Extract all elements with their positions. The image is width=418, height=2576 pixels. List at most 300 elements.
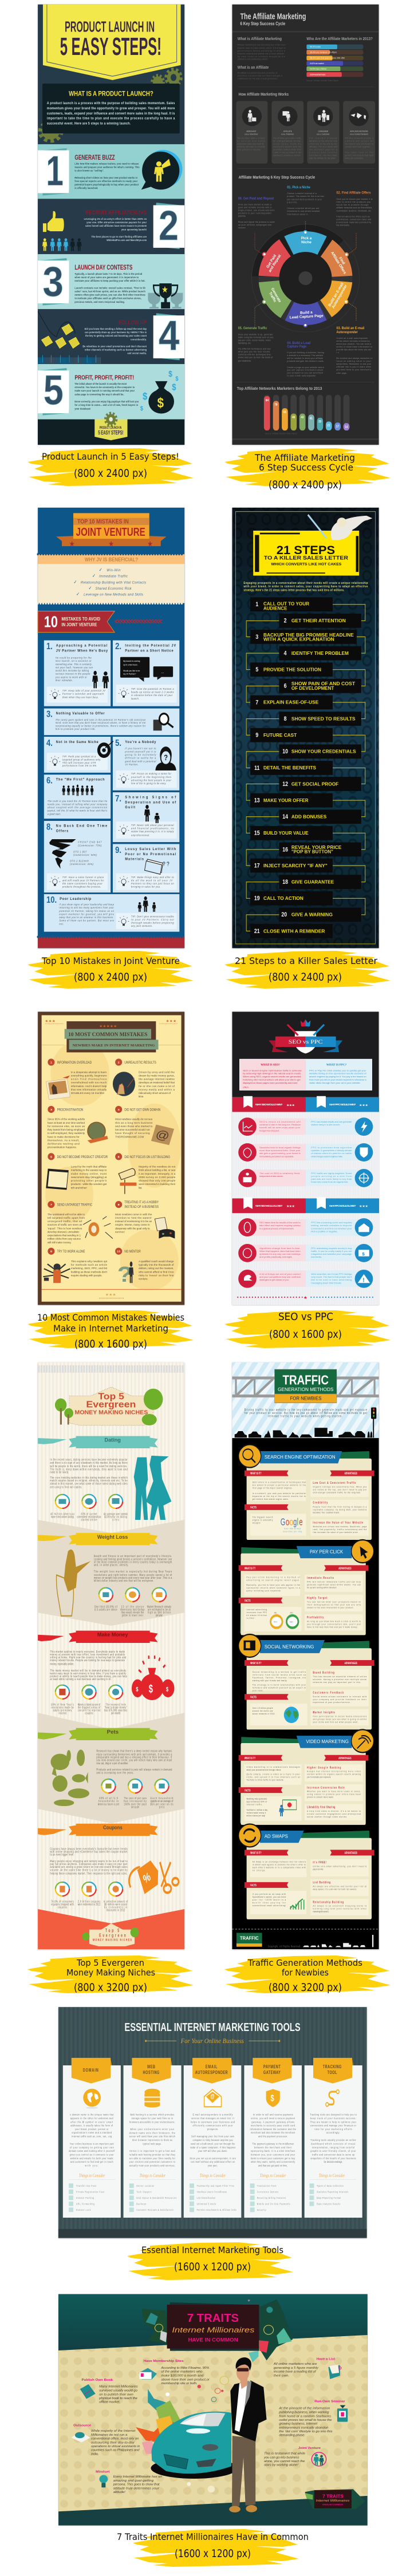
header block: ★★★ [45,1019,56,1024]
wheel section text: about your product. You can build a [337,343,371,345]
section: social networking: Facebook, Twitter, Pinterest, Instagram, etc [253,1677,306,1679]
step 4: can potentially dram up your business by +500%? This is [85,331,147,334]
niche body text: This market applies to nearly everyone. Everybody wants to make [50,1650,125,1653]
niche body text: The make money market will be in demand almost as everybody [50,1669,127,1672]
section: search engine optimization: FACTS [250,1506,257,1509]
title badge [55,1387,163,1425]
mistake body text: were interested in building their [139,1183,176,1186]
mistake body text: Lured by the myth that affiliate [71,1165,107,1168]
wheel section text: Be creative and always remember to [337,357,372,359]
how it works cards: a.k.a. Advertiser [245,133,258,135]
step 5: Done correctly, you can enjoy big paydays that will last you [74,400,139,403]
mistake cards: The truth is you need the JV Partner more than he [48,800,108,803]
bar chart: who are the marketers: 38.6% are between 35~45yrs [310,51,337,54]
comparison rows: site gets a good ranking, your brand is [259,1152,301,1155]
niche body text: Research has shown that there's a deep rooted reason why humans [97,1749,172,1753]
why JV section: Shared Economic Risk [96,586,132,591]
how it works cards: the customer pays for a [309,148,337,151]
tool card: payment gateway: and that you get paid on time. [258,2164,287,2167]
mistake icons: ? [117,1262,132,1286]
niche body text: of the most common problems in every country today is overweight [94,1560,172,1564]
mistake cards: mind: Give over that you don't have reciprocal values, or have a history of not [56,721,146,724]
title [124,2021,301,2045]
section: search engine optimization: like increase the value of your website price. [313,1531,358,1534]
section: search engine optimization: Websites are virtual real estates. Backlinks, page [313,1525,366,1528]
what is SEO / PPC box [240,1059,372,1090]
mistake card icons: Would you like to be [123,670,140,672]
section: ad swaps: List Building [313,1880,330,1884]
step 1: free special reports are effective methods to ready your [74,180,138,183]
caption: product launch brush [27,448,194,486]
what is SEO / PPC box: SEO or Search Engine Optimization traffic is achieved [243,1069,302,1072]
intro text: with your brand. In order to convert sales, your copywriting have to adapt an effective [243,585,368,588]
definitions: commission for the sale or lead generated. [238,77,278,80]
title box: 7 TRAITS [187,2312,239,2325]
mistake body text: The uninitiated will not be able to [48,1213,85,1216]
section: ad swaps: Ad swaps is an excellent stepping stone to [313,1905,366,1907]
step labels: GIVE GUARANTEE [291,879,334,885]
section: pay per click: generate significant sales within weeks. You can [307,1583,361,1586]
illustration: sports car [151,2412,238,2479]
footer: Copyright. All Rights Reserved. [268,1945,301,1948]
mistake cards: JV Partner When He's Busy [56,649,108,653]
tool card: tracking tool [305,2058,362,2218]
section: ad swaps: It's FREE! [313,1860,326,1864]
section: social networking: referrals from social media sites such as [253,1674,306,1676]
tool card: tracking tool: TRACKING [323,2065,341,2070]
section: pay per click: You can narrow down your prospects based on [307,1601,361,1603]
mistake body text: money easily and within a [139,1088,175,1091]
mistake cards: TIP: Don't give unnecessary trouble [131,915,174,918]
step labels: ADD BONUSES [291,814,327,820]
mistake body text: 2006 survey on 3,000 people [139,1176,176,1179]
section: pay per click: shown to the ones interested in your product. [307,1606,354,1609]
wheel section text: your experience. [238,359,251,362]
10 mistakes banner [38,611,163,633]
mistake cards: Some of them can be patient. But most are [59,919,114,922]
ring captions: An average user spends [104,1512,128,1516]
footer badge: HAVE IN COMMON [322,2504,344,2506]
ring captions: Americans told Gallup [120,1608,145,1611]
step labels: GET THEIR ATTENTION [291,618,346,623]
caption: common mistakes brush: (800 x 1600 px) [74,1338,147,1350]
niche body text: The truth is, deep down within everybody, they want to love and [50,1468,128,1471]
tool card: web hosting: typical web page. [143,2142,161,2146]
mistake cards: and still credit your JV Partners for [62,879,104,882]
mistake body text: survive! [115,1231,125,1233]
ring captions: spends on an average of [151,1799,173,1803]
connector lines [246,605,365,931]
trait: have membership sites: membership site or both. [161,2382,198,2385]
niche body text: need to be loved. [50,1471,69,1474]
mistake cards: not your fault. However you can [56,666,93,669]
comparison rows: of visitors when it's paid for no matter [311,1152,352,1155]
mistake cards: in advance before the date of your [131,694,173,697]
definitions: affiliate's own marketing efforts. [238,58,268,60]
trait: run own seminar: growing business, Internet [279,2423,318,2426]
bar chart: who are the marketers: 53.5% have children [310,68,326,70]
title splash right [248,2300,293,2362]
step labels: CLOSE WITH A REMINDER [263,929,325,934]
mistake cards: Partners so they can just focus on [131,882,174,885]
title: For Your Online Business [180,2038,244,2045]
why would lose band: ★★★ [360,1205,368,1208]
step labels: CALL TO ACTION [263,895,303,901]
step numbers: 9 [255,732,259,739]
step labels: SHOW PAIN OF AND COST [291,681,356,686]
rings [55,1494,169,1897]
step labels: IDENTIFY THE PROBLEM [291,650,349,656]
sign: GENERATION METHODS [278,1388,334,1392]
comparison rows: strategies to get ahead of you. [259,1278,289,1281]
step numbers: 2 [284,618,287,625]
section: ad swaps: warp speed. It's a win-win for both list owners. [313,1888,357,1891]
intro text: strategy. Here's the 21 steps sales letter process that has sold tens of millions. [244,588,344,592]
footer badge [305,2489,365,2509]
tool card: tracking tool: Tracking tools usually provide an online [310,2138,356,2142]
section: video marketing: Video marketing is to communicate messages [247,1765,300,1768]
section: pay per click: you through your conversation rate, you'll just [307,1623,361,1626]
wheel section text: income. [238,227,246,229]
niche body text: product or ability to teach people how to make money, you can help [50,1674,127,1678]
caption: evergreen niches brush [27,1955,194,1994]
chart: top affiliate networks: 17 [336,425,339,429]
section: pay per click: have to bid less than that and you'll make money. [307,1626,358,1629]
mistake headings: 5 [50,1156,52,1159]
ring captions: $8 million were saved [104,1903,127,1906]
section: video marketing: create audience engagement and widespread [307,1812,361,1815]
tool card: domain: Domain Lock [76,2209,90,2211]
niche body text: Health and fitness is an important part of everybody's lifestyle. [94,1554,172,1558]
mistake body text: Most newbies usually do not see [115,1118,153,1121]
how it works cards: MERCHANT [246,130,257,132]
how it works cards: AFFILIATE [283,130,293,132]
ring captions: 40 million American [50,1512,74,1516]
caption: seven traits brush: 7 Traits Internet Millionaires Have in Common [117,2531,309,2542]
mistake cards: Nothing Valuable to Offer [56,712,105,716]
section: video marketing: internet traffic. [247,1803,263,1806]
section: pay per click: FACTS [245,1599,251,1602]
trait: outsource [72,2424,140,2456]
niche body text: match couples based on religion, ethnicity, interests and etc. To be [50,1479,128,1482]
niche body text: you look around your circle, you will notice many who own at least [97,1759,172,1762]
why JV section: ✓ [73,579,77,584]
trait: joint venture [263,2447,326,2467]
mistake cards: If you show signs of poor leadership and keep [59,903,114,906]
wheel section text: affiliate link in your e-mails when [337,366,371,368]
section: search engine optimization: g [293,1517,297,1528]
section: pay per click: Pay-per-click marketing is a method of [247,1576,300,1579]
niche illustrations: $ [136,1686,139,1693]
section: video marketing: YouTube's 1 million a day [247,1808,267,1811]
step numbers: 15 [254,830,260,837]
chart: six step success wheel: Build an E-mail [328,282,345,307]
mistake cards: about coupled with the average commission [48,806,108,809]
trait: run own seminar: outlet proves too small to house the [279,2419,332,2422]
header: 6 Key Step Success Cycle [240,21,285,26]
tool card: payment gateway: information between the customer and the [250,2127,296,2131]
section: search engine optimization: Over 450 million [284,1527,301,1530]
tool card: domain: DOMAIN [83,2068,98,2073]
mistake headings: INFORMATION OVERLOAD [57,1061,92,1065]
section: social networking: Social media allows customers to interact with [313,1695,366,1698]
caption: SEO vs PPC brush [224,1310,391,1348]
section: social networking: starting with your friends and family. [253,1680,287,1682]
footer badge: 7 TRAITS [322,2494,344,2499]
step labels: "POP BY BUTTON" [291,849,333,855]
trait: outsource: Millionaires do not run a [91,2433,128,2437]
caption: SEO vs PPC brush: SEO vs PPC [278,1311,333,1323]
why would lose band: WHY PPC WOULD LOSE? [329,1204,356,1208]
trait: have a list: income have a mailing list of [274,2370,317,2374]
mistake card icons [49,657,176,912]
step 3: ★ [161,285,168,295]
footer line and stars: ★★★ [105,1293,116,1297]
how it works cards: for a merged website via free, [273,140,301,143]
mistake cards: 6. [46,776,53,786]
wheel section text: shows best you do from the funds of [238,356,273,359]
step 4: Be relentless in your email promotions and don't discount [82,345,147,348]
comparison rows: ! [362,1277,365,1283]
tool card: payment gateway: Recurring Billing Features [257,2197,286,2199]
caption: marketing tools brush [127,2242,293,2280]
yellow title block and samurai: TO A KILLER SALES LETTER [264,555,348,561]
step labels [263,601,356,934]
chart: top affiliate networks: 48 [292,416,295,419]
step numbers: 5 [255,666,259,673]
section: video marketing: Quite simply, create a video on a topic in your [247,1773,300,1776]
tool card: domain: domain name and looking after it yourself [69,2149,115,2152]
how it works cards: CONSUMER [318,130,329,132]
wheel section text: 04. Build a Lead [287,341,311,345]
ring captions: per year [156,1614,163,1617]
wheel section text: 02. Find Affiliate Offers [337,191,371,195]
ring captions: they would elevate the [121,1611,144,1614]
panel: 21 Steps to a Killer Sales Letter [232,508,379,948]
trait: joint venture: Joint Venture [298,2447,321,2450]
mistake cards: do all the work to all your JV [131,879,173,882]
section: video marketing: Whether you want to have more leads or sales, [307,1790,361,1793]
step 5: $ [172,382,176,393]
chart: top affiliate networks: 68 [283,410,286,414]
trait: outsource: operations to virtual assistants in [91,2445,140,2448]
step numbers: 18 [282,879,289,886]
why would lose band: WHY SEO WOULD LOSE? [255,1204,283,1208]
section: ad swaps: WHAT IS IT? [250,1851,262,1855]
ring captions [50,1512,173,1912]
footer badge: Evergreen [99,1934,126,1938]
step numbers: 20 [281,912,287,919]
niche body text: money related forums. People are looking for new ways to generate [50,1658,125,1662]
section: social networking: and groups helps you see what is going on within [313,1718,366,1720]
niche body text: volume. At the same time there's a lot of money to be made by [50,1868,128,1872]
tool card: domain: organization's name and a standard [72,2131,112,2134]
tool card: payment gateway: sponsoring bank. It is a vital interface [251,2149,295,2152]
mistake headings: 8 [118,1203,120,1207]
how it works cards: precisely aimed leads with [273,148,301,151]
mistake cards: TIP: Give the potential JV Partner a [131,688,174,690]
mistake body text: ridiculously short amount of [139,1092,171,1095]
wheel section text: Affiliate Marketing 6 Key Step Success Cycle [239,175,315,180]
section: pay per click: 2011 [274,1611,277,1614]
comparison rows: traffic. It can be costly easily if you are [311,1250,352,1253]
ring captions: 2.9 billion coupons [78,1900,100,1903]
tool card: payment gateway: between you, your customers and your [251,2153,295,2156]
how it works cards: websites on the Internet and [309,140,337,143]
mistake body text [48,1071,176,1280]
title badge: Evergreen [86,1399,136,1409]
section: ad swaps: no charge. [253,1869,266,1872]
trait: outsource: India. [91,2452,98,2456]
mistake cards: 8. [46,823,53,832]
why JV section: ✓ [92,573,96,579]
step 1: Releasing short videos on how your new product works or [74,176,138,179]
section: pay per click: ADVANTAGES [338,1567,352,1570]
tool card: payment gateway: Transaction Fees [257,2185,276,2187]
panel: 10 Most Common Mistakes [38,1012,184,1305]
mistake body text: deliberate waiting and [48,1143,80,1145]
step 3: to motivate your affiliates such as gifts from exclusive stores, [74,297,141,300]
trait: outsource: countries such as Philippines and [91,2449,140,2452]
header ribbon [56,513,167,548]
step numbers: 7 [255,700,259,706]
niche body text: money on weight loss products and every new year after year. This is a [94,1576,172,1579]
mistake cards: Partner on a Short Notice [125,649,173,653]
step numbers: 3 [255,634,259,641]
how it works cards: information, the merchant [309,154,337,157]
wheel section text: series of name-base information or [337,346,373,348]
section: pay per click: be up and running within minutes! [307,1586,337,1589]
step 2: RECRUIT AFFILIATES/JVS [85,210,147,216]
mistake cards: Desperation and Use of [125,800,176,805]
how it works cards: their products or services. [237,148,261,151]
mistake headings: 9 [50,1250,52,1254]
section: pay per click: revenues from PPC [247,1611,267,1614]
why would win band: ★★★ [360,1104,368,1107]
how it works cards: The merchant owns a product [237,137,265,140]
mistake cards: attracting the best people in your [131,779,171,782]
what is SEO / PPC box: When using SEO, organic search results are generated. [243,1075,302,1078]
definitions: What is Affiliate Marketing [238,36,282,41]
chart: top affiliate networks: 14 [345,425,348,429]
section: social networking: Brand Building [313,1671,334,1674]
step numbers: 21 [254,928,260,935]
why JV section: WHY JV IS BENEFICIAL? [85,556,138,563]
how it works cards: connect and trade together. [345,145,370,148]
trait: have a list [273,2357,341,2379]
caption: affiliate marketing brush: 6 Step Success Cycle [259,462,353,473]
mistake card icons: ? ? [163,861,169,867]
section: pay per click: As long as you know how much a click is worth to [307,1620,361,1623]
caption: joint venture brush: (800 x 2400 px) [74,971,147,983]
title box [167,2302,259,2351]
trait: mindset [96,2470,162,2494]
step labels: GIVE A WARNING [291,912,333,918]
why would lose band [232,1197,379,1213]
section: social networking: Over 1.5 billion people [253,1706,273,1709]
wheel section text: affiliate networks such as ShareASale, [337,207,372,209]
step labels: REVEAL YOUR PRICE [291,844,342,850]
caption: affiliate marketing brush [224,448,391,491]
footer strip [38,937,184,948]
trait: run own seminar: from home or a random Starbucks [279,2415,331,2418]
mistake body text: Most newbies come in with the [115,1213,152,1216]
step 2: your upcoming launch! [121,228,147,231]
caption: joint venture brush [27,951,194,989]
step labels: SHOW SPEED TO RESULTS [291,716,356,722]
tool card: domain: Things to Consider [79,2174,105,2178]
tool card: tracking tool: Types of Data Collection [317,2185,344,2187]
trait: mindset: Every Internet Millionaire has an [113,2475,162,2479]
wheel section text: to your e-mail autoresponder. [287,374,317,377]
comparison rows: testing, website variables to improve [311,1224,352,1227]
mistake body text: themselves. As a result, [48,1139,80,1141]
tool card: payment gateway: In order to sell and receive payments [253,2113,293,2116]
footer badge: PRODUCT LAUNCH IN [100,426,121,430]
comparison rows: Algorithms change from time to time. [259,1247,301,1250]
trait: publish own book [80,2379,138,2404]
header block [42,1019,181,1052]
tool card: payment gateway: gateway. A payment gateway allows [251,2120,294,2124]
what is SEO / PPC box: how much you bid on your chosen keyword to whenever a [309,1078,367,1081]
niche illustrations: $ [166,1686,169,1693]
tool card: web hosting [124,2058,182,2218]
mistake cards: needs you. Instead of telling what your company [48,803,108,806]
ring captions: Market Research already [147,1605,172,1609]
section: pay per click: $18.9 [290,1621,293,1623]
section: video marketing: you to increase your exposure. [307,1776,331,1779]
comparison rows: optimized in any way can lose rankings [259,1253,301,1255]
mistake body text: think about building a list, or see [139,1169,176,1172]
step labels: WITH A QUICK EXPLANATION [263,637,334,642]
bar chart: who are the marketers: 58.6% earn 5-6 year income 20K-35K [310,57,345,60]
panel: SEO vs PPC [232,1012,379,1305]
section: social networking: your niche and find out what people want. [313,1721,358,1723]
how it works cards: AFFILIATE NETWORK [350,130,368,132]
step 5: stressful. You have to be constantly at the computer to [74,386,135,389]
header ribbon: JOINT VENTURE [76,526,145,539]
mistake body text: the average internet newbie [139,1078,175,1080]
definitions: business rewards and awards one or more affiliates [238,53,284,55]
section: ad swaps: Relationship Building [313,1901,344,1903]
mistake cards: them when they are least busy. [62,696,98,699]
section: video marketing: FACTS [245,1789,251,1792]
niche body text: In the recent years, dating services have become extremely popular [50,1458,128,1461]
mistake headings: PROCRASTINATION [57,1108,83,1112]
step labels: MAKE YOUR OFFER [263,797,309,803]
section: search engine optimization: Google! [253,1522,261,1524]
how it works cards: allowing affiliates to promote [237,145,265,148]
how it works cards: product and related [309,151,337,154]
step 1: is also known as "soiling". [74,169,104,172]
comparison rows: and your competitors may use unethical [259,1275,301,1278]
step 4: other channels of marketing such as banner advertising [85,348,147,351]
wheel section text: a website is a necessary. This website [287,354,323,357]
comparison rows: A lot of things are out of your control [259,1273,301,1275]
mistake cards: 7. [115,794,121,804]
comparison rows: very much. The fact is that people don't [311,1275,352,1278]
niche body text: Looking and feeling good boosts a person's confidence. However one [94,1558,172,1561]
section: pay per click [239,1540,374,1635]
section: search engine optimization: get visitors from search engine users. [253,1498,289,1500]
definitions: popular ways to make money online. It is a type of [238,47,286,49]
tool card: web hosting: Disk Space & Bandwidth Resources [136,2197,176,2199]
tool card: payment gateway: PAYMENT [263,2065,281,2070]
tool card: email autoresponder: service that manages an email list. It [191,2116,234,2120]
gantry [232,1378,379,1396]
step 4: Did you know that sending a follow-up email the next day [85,327,147,330]
intro box: customers, leads, expand your influence and convert more sales in the long haul. It is [47,112,175,116]
